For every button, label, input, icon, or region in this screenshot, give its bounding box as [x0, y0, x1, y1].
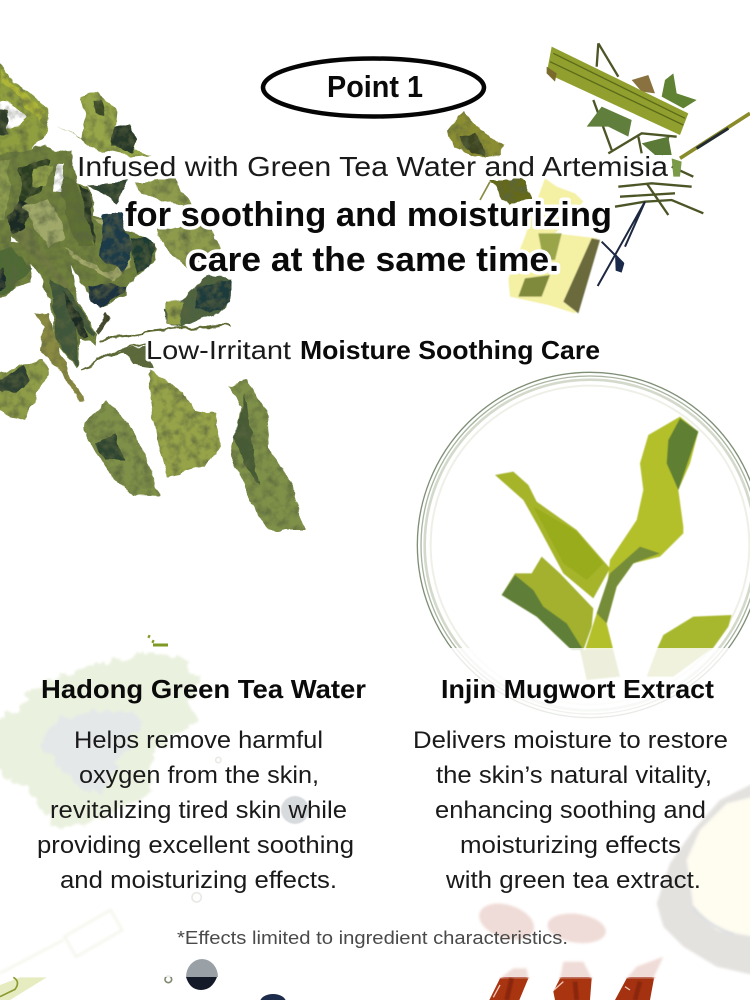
- stems: [82, 325, 230, 368]
- badge outline: [263, 58, 484, 116]
- pomegranate seeds: [489, 978, 654, 1000]
- subheading bold: Moisture Soothing Care: [300, 335, 600, 365]
- long stem: [680, 113, 750, 158]
- translucent white panel: [0, 648, 750, 977]
- pale yellow chip: [508, 178, 600, 313]
- seed highlights: [493, 982, 630, 997]
- column body: oxygen from the skin,: [79, 762, 319, 789]
- dropper: [0, 910, 122, 973]
- column body: providing excellent soothing: [37, 832, 354, 859]
- column body: enhancing soothing and: [435, 797, 706, 824]
- blueberry: [186, 959, 286, 1000]
- badge: Point 1: [263, 58, 484, 116]
- petri dish with mugwort leaves: [417, 372, 750, 718]
- faded blueberry: [281, 796, 309, 824]
- column body: Helps remove harmful: [74, 727, 323, 754]
- matcha shadow: [40, 710, 143, 797]
- bowl and pomegranate seeds: [475, 783, 750, 978]
- leaf: narrow curled: [35, 312, 87, 403]
- column body: with green tea extract.: [445, 867, 701, 894]
- leaf: right light: [137, 180, 220, 268]
- leaf: lower center-left: [82, 402, 159, 497]
- leaf: top-left curl: [0, 60, 50, 160]
- leaf: small chip: [163, 275, 231, 327]
- artemisia log: [547, 47, 688, 135]
- green tea leaves: lower pieces: [0, 312, 305, 530]
- subheading regular: Low-Irritant: [146, 335, 292, 365]
- dark column: [50, 280, 95, 368]
- blueberry top: [186, 959, 218, 977]
- dark blue folds: [100, 212, 133, 273]
- brown chip lower: [490, 180, 532, 203]
- seed two: [553, 978, 592, 1000]
- column body: [37, 727, 354, 894]
- seed shading: [507, 978, 640, 1000]
- badge label: Point 1: [327, 69, 423, 104]
- droplets: [165, 757, 221, 983]
- mugwort leaf: tall: [585, 417, 698, 650]
- dark navy twigs: [598, 202, 645, 286]
- green tea leaves: upper cluster: [0, 60, 231, 370]
- blueberry bottom: [186, 977, 217, 990]
- faded seeds: [475, 897, 663, 978]
- seed one: [489, 978, 528, 1000]
- dish rim rings: [417, 372, 750, 718]
- cream: [687, 797, 750, 937]
- green sprigs: [662, 73, 697, 108]
- column: Injin Mugwort Extract: [413, 674, 728, 894]
- headline line 2: care at the same time.: [188, 241, 559, 279]
- column body: the skin’s natural vitality,: [436, 762, 712, 789]
- mugwort leaf: right: [657, 615, 732, 650]
- second blueberry: [260, 994, 286, 1000]
- chips: [448, 110, 532, 203]
- leaf reflections: [580, 650, 620, 680]
- headline: [125, 196, 612, 279]
- column body: revitalizing tired skin while: [50, 797, 347, 824]
- dropper tip: [0, 977, 47, 1000]
- column heading: Hadong Green Tea Water: [41, 674, 366, 704]
- footnote: *Effects limited to ingredient characteristics.: [177, 927, 568, 948]
- matcha powder: [0, 653, 200, 827]
- curl band: [63, 220, 132, 280]
- headline line 1: for soothing and moisturizing: [125, 196, 612, 234]
- light gaps: [55, 162, 65, 193]
- matcha powder and dropper: [0, 653, 309, 983]
- leaf: lower right: [228, 380, 305, 530]
- leaf: lower middle: [148, 370, 220, 477]
- brown chip top: [448, 110, 503, 157]
- subheading: [146, 335, 600, 365]
- bowl: [657, 783, 750, 975]
- bowl inner edge: [692, 907, 733, 935]
- twigs: [593, 43, 703, 215]
- matcha crumbs: [148, 636, 168, 645]
- column body: Delivers moisture to restore: [413, 727, 728, 754]
- seed three: [615, 978, 654, 1000]
- intro text: Infused with Green Tea Water and Artemisia: [77, 151, 668, 182]
- column: Hadong Green Tea Water: [37, 674, 366, 894]
- leaf: top: [56, 92, 150, 157]
- column body: moisturizing effects: [460, 832, 681, 859]
- leaf: main tangled body: [0, 145, 157, 370]
- striped stem: [10, 227, 73, 293]
- artemisia stems and chips: [448, 43, 750, 313]
- leaf: left chip: [0, 360, 50, 420]
- column body: and moisturizing effects.: [60, 867, 337, 894]
- leaf: dark triangle: [88, 182, 130, 203]
- column heading: Injin Mugwort Extract: [441, 674, 714, 704]
- mugwort leaf: left: [495, 472, 610, 598]
- column body: [413, 727, 728, 894]
- mugwort leaf: lower left: [502, 557, 593, 650]
